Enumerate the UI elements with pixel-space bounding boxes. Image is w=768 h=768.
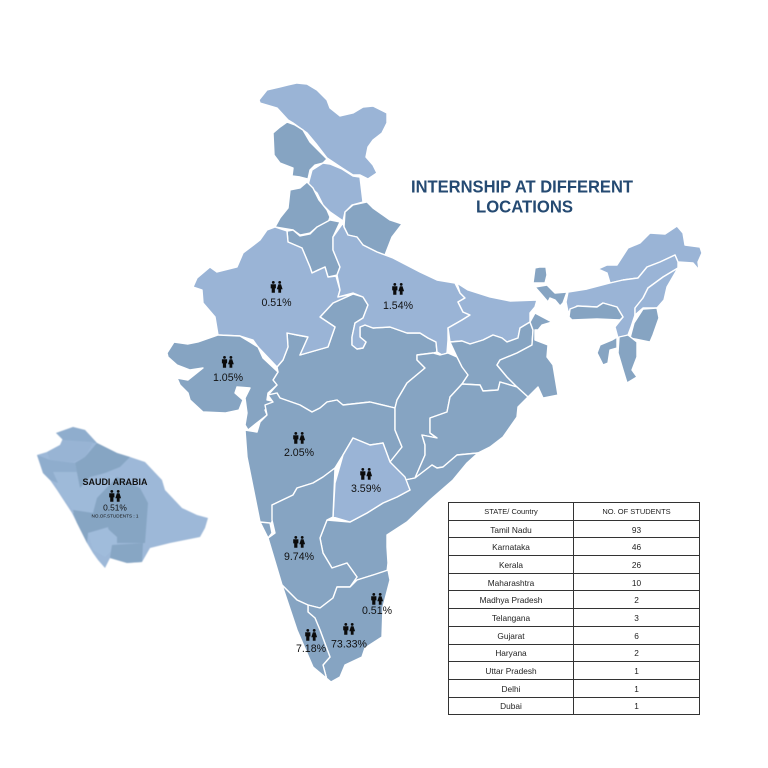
table: students by state: 46 — [632, 542, 641, 552]
state: Himachal Pradesh — [308, 163, 363, 221]
state: Tamil Nadu — [308, 570, 390, 682]
table: students by state: Uttar Pradesh — [485, 666, 537, 676]
table: students by state: 2 — [634, 648, 639, 658]
marker: Saudi Arabia — [82, 477, 148, 518]
map: Saudi Arabia — [37, 427, 208, 568]
marker: Saudi Arabia: NO.OF.STUDENTS : 1 — [92, 513, 139, 518]
state: Telangana — [333, 438, 410, 522]
marker: Kerala 7.18% — [296, 629, 327, 655]
state: Rajasthan — [193, 227, 353, 367]
marker: Uttar Pradesh 1.54% — [383, 283, 414, 312]
table: students by state: 1 — [634, 701, 639, 711]
table: students by state: NO. OF STUDENTS — [602, 507, 671, 516]
table: students by state: 10 — [632, 578, 641, 588]
table: students by state: 93 — [632, 525, 641, 535]
state: West Bengal — [497, 313, 558, 398]
Saudi region: north centre — [75, 443, 130, 488]
table: students by state: 2 — [634, 595, 639, 605]
table: students by state: 3 — [634, 613, 639, 623]
Saudi outline — [37, 427, 208, 568]
state: Goa — [260, 522, 272, 538]
title: INTERNSHIP AT DIFFERENT — [411, 176, 633, 196]
table: students by state: 26 — [632, 560, 641, 570]
state: Kerala — [282, 585, 331, 682]
state: Sikkim — [533, 267, 547, 283]
state: Tripura — [597, 337, 617, 365]
state: Arunachal Pradesh — [598, 226, 702, 283]
state: Assam — [566, 255, 678, 338]
marker: Telangana 3.59% — [351, 468, 382, 495]
marker: Karnataka 9.74% — [284, 536, 315, 563]
marker: Saudi Arabia: 0.51% — [103, 502, 127, 512]
state: North Bengal strip — [535, 285, 567, 306]
marker: Tamil Nadu 73.33%: 73.33% — [331, 638, 368, 650]
table: students by state: STATE/ Country — [484, 507, 538, 516]
table: students by state: Kerala — [499, 560, 523, 570]
marker: Rajasthan 0.51% — [261, 281, 292, 309]
state: Chhattisgarh — [390, 353, 468, 480]
state: Karnataka — [268, 468, 357, 608]
table: students by state: Telangana — [492, 613, 530, 623]
Saudi region: north-west coast — [37, 455, 77, 483]
state: Manipur — [630, 308, 659, 342]
state: Uttar Pradesh — [333, 223, 470, 355]
table: students by state — [448, 502, 700, 715]
marker: Saudi Arabia: SAUDI ARABIA — [82, 477, 148, 488]
marker: Maharashtra 2.05% — [284, 432, 315, 459]
state: Mizoram — [618, 335, 637, 383]
state: Nagaland — [635, 268, 678, 315]
state: Maharashtra — [245, 393, 402, 530]
state: Haryana — [287, 220, 340, 277]
table: students by state: Delhi — [502, 684, 520, 694]
marker: Kerala 7.18%: 7.18% — [296, 643, 327, 655]
table: students by state: 6 — [634, 631, 639, 641]
marker: Maharashtra 2.05%: 2.05% — [284, 447, 315, 459]
Saudi region: west — [53, 463, 117, 513]
table: students by state: 1 — [634, 684, 639, 694]
table: students by state: 1 — [634, 666, 639, 676]
table: students by state: Haryana — [495, 648, 527, 658]
marker: Andhra Pradesh 0.51% — [362, 593, 393, 617]
table: students by state: Tamil Nadu — [490, 525, 532, 535]
marker: Andhra Pradesh 0.51%: 0.51% — [362, 605, 393, 617]
state: Punjab — [275, 182, 330, 235]
state: Jammu and Kashmir — [259, 83, 387, 179]
state: Andhra Pradesh — [320, 453, 478, 583]
state: Ladakh region — [273, 122, 327, 179]
table: students by state: Madhya Pradesh — [480, 595, 542, 605]
map: India states — [167, 83, 702, 682]
Saudi region: north — [47, 440, 93, 462]
table: students by state: Gujarat — [497, 631, 525, 641]
Saudi region: centre — [73, 477, 148, 543]
state: Bihar — [448, 283, 537, 344]
state: Meghalaya — [569, 303, 623, 320]
title: LOCATIONS — [476, 196, 573, 216]
Saudi region: Asir — [88, 528, 117, 557]
state: Odisha — [415, 382, 528, 478]
marker: Gujarat 1.05% — [213, 356, 244, 384]
title — [411, 176, 633, 216]
Saudi region: north-west — [56, 427, 97, 443]
marker: Rajasthan 0.51%: 0.51% — [261, 297, 292, 309]
state: Gujarat — [167, 335, 278, 430]
table: students by state: Maharashtra — [488, 578, 534, 588]
marker: Tamil Nadu 73.33% — [331, 623, 368, 650]
state: Uttarakhand — [344, 202, 402, 255]
table: students by state: Dubai — [500, 701, 522, 711]
state: Madhya Pradesh — [268, 294, 437, 412]
Saudi region: south-west — [73, 513, 108, 543]
marker: Gujarat 1.05%: 1.05% — [213, 372, 244, 384]
Saudi region: south — [110, 543, 143, 563]
marker: Karnataka 9.74%: 9.74% — [284, 551, 315, 563]
marker: Telangana 3.59%: 3.59% — [351, 483, 382, 495]
table: students by state: Karnataka — [492, 542, 530, 552]
marker: Uttar Pradesh 1.54%: 1.54% — [383, 300, 414, 312]
state: Jharkhand — [450, 322, 533, 391]
